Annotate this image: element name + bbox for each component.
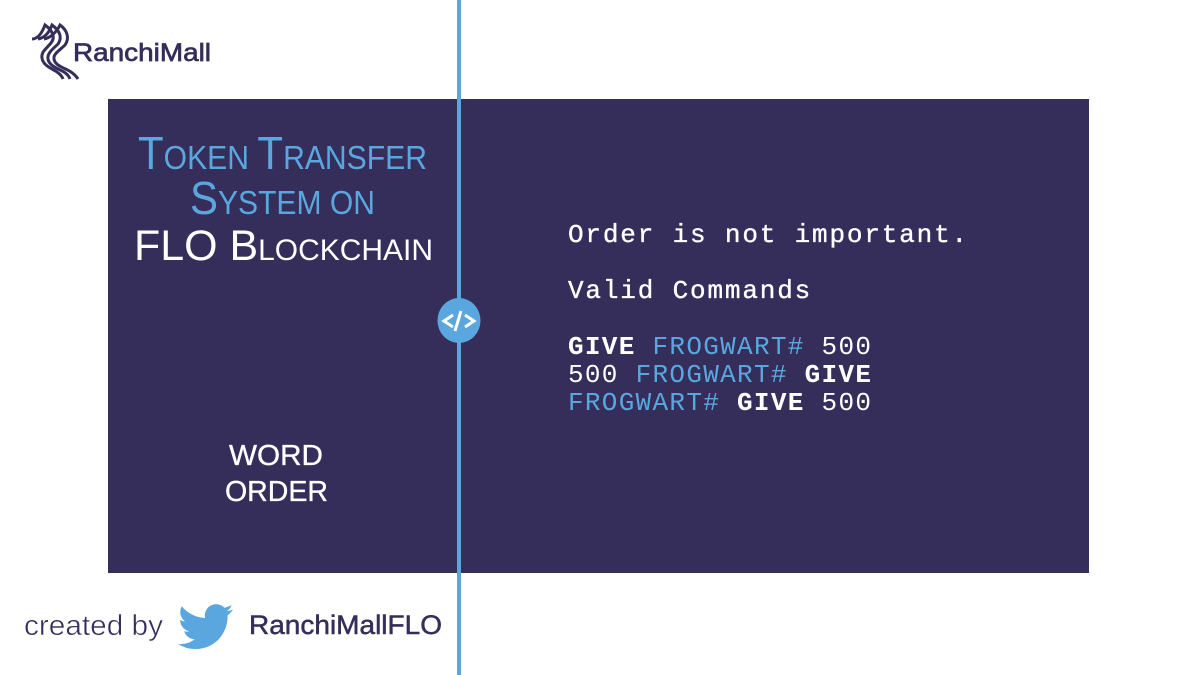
logo wordmark: RanchiMall bbox=[73, 39, 211, 67]
footer: credit bbox=[24, 604, 442, 649]
text block: commands bbox=[568, 220, 969, 418]
heading: valid commands: Valid Commands bbox=[568, 276, 812, 306]
panel: main dark background bbox=[108, 99, 1089, 573]
subtitle line 1: WORD bbox=[229, 440, 323, 472]
title line 2: SYSTEM ON bbox=[190, 172, 375, 224]
command 2: 500 FROGWART# GIVE bbox=[568, 360, 872, 390]
created by label: created by bbox=[24, 610, 164, 642]
icon: twitter bird bbox=[178, 604, 233, 649]
logo: RanchiMall bbox=[32, 25, 211, 79]
command 1: GIVE FROGWART# 500 bbox=[568, 332, 872, 362]
icon: seahorse logo bbox=[32, 25, 78, 79]
vertical divider line bbox=[457, 0, 461, 675]
title line 3: FLO BLOCKCHAIN bbox=[134, 222, 433, 270]
command 3: FROGWART# GIVE 500 bbox=[568, 388, 872, 418]
statement: Order is not important. bbox=[568, 220, 969, 250]
twitter handle: RanchiMallFLO bbox=[249, 610, 442, 640]
subtitle: word order bbox=[225, 440, 328, 508]
subtitle line 2: ORDER bbox=[225, 476, 328, 508]
title line 1: TOKEN TRANSFER bbox=[138, 127, 427, 179]
title bbox=[134, 127, 433, 270]
icon: code badge bbox=[438, 298, 480, 343]
